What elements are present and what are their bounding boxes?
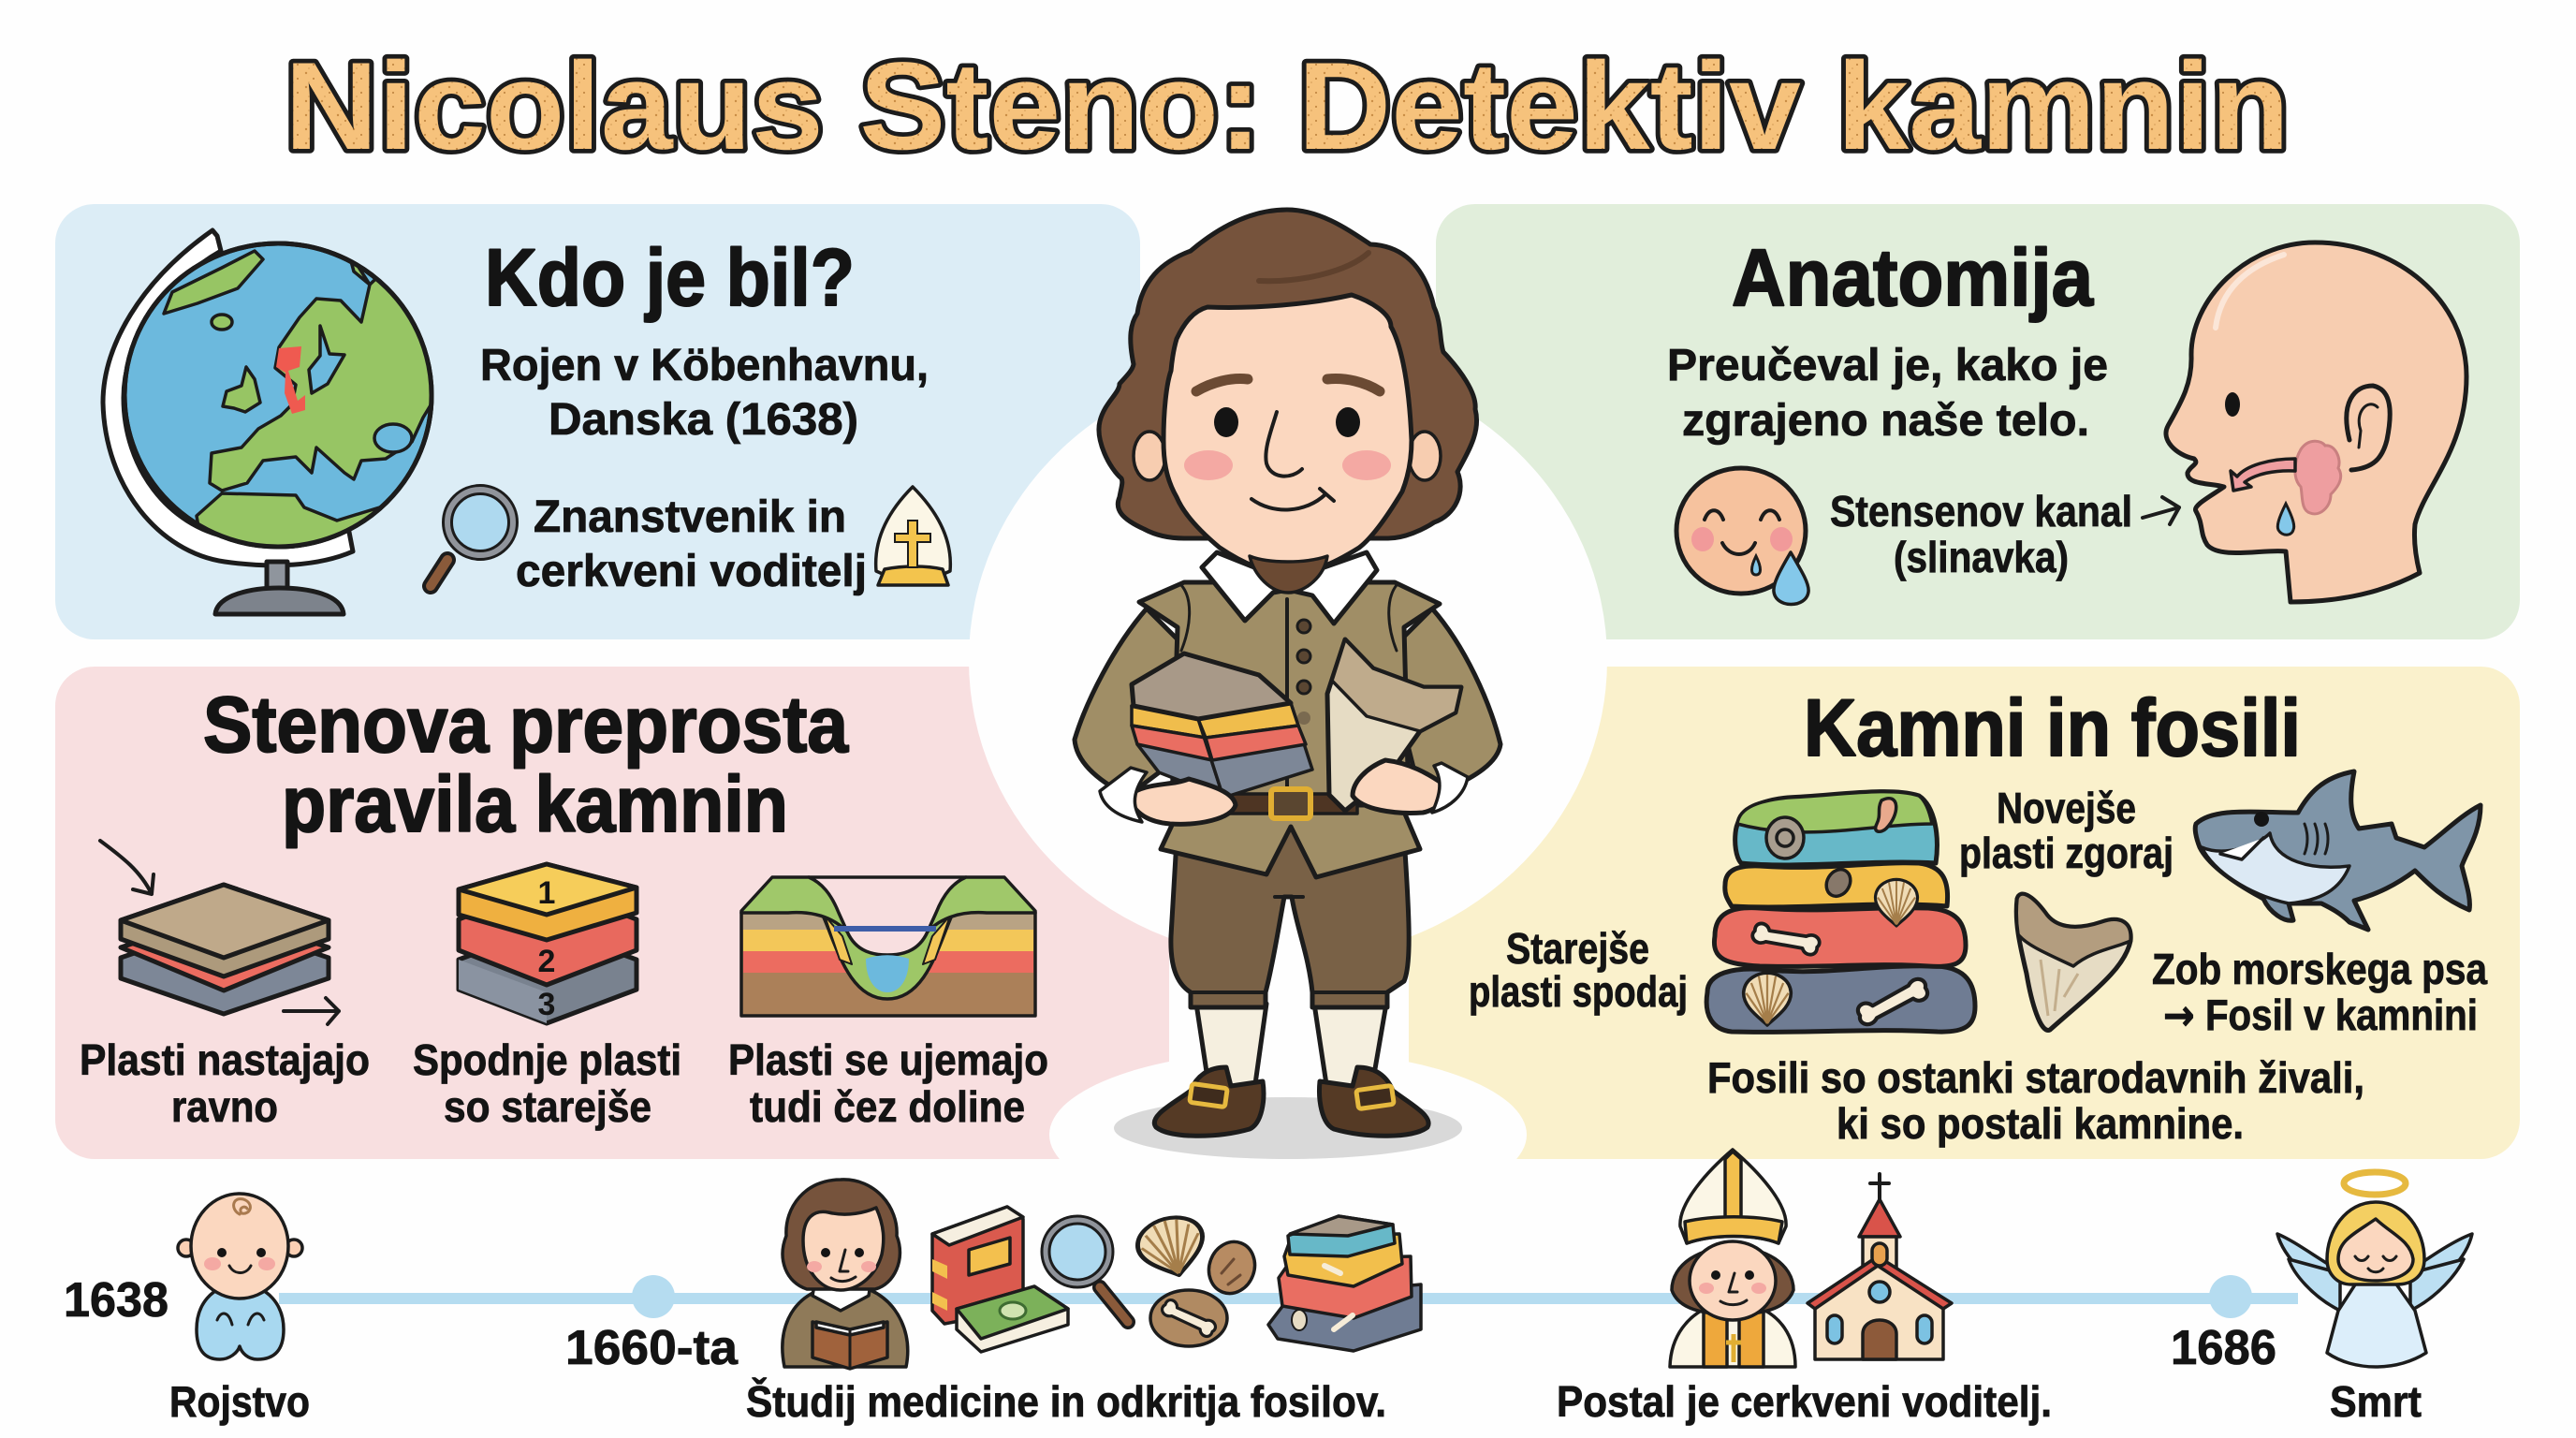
collar — [1202, 552, 1377, 624]
torso — [1139, 582, 1440, 805]
angel hair — [2327, 1202, 2424, 1284]
timeline node 1686 — [2209, 1275, 2252, 1318]
text: anatomy description: Preučeval je, kako je — [1667, 341, 2108, 390]
ground shadow — [1114, 1097, 1462, 1159]
belt and buckle — [1226, 789, 1357, 818]
globe continents — [162, 249, 429, 545]
eyes — [1214, 407, 1238, 437]
arrows — [100, 841, 339, 1024]
timeline node 1660s — [632, 1275, 675, 1318]
valley lining — [816, 903, 959, 999]
brows — [1196, 379, 1380, 391]
year 1686: 1686 — [2171, 1321, 2276, 1375]
shoes — [1154, 1067, 1264, 1136]
icon: baby — [178, 1194, 302, 1359]
text: shark tooth caption: Zob morskega psa — [2152, 945, 2487, 993]
angel halo — [2344, 1172, 2406, 1195]
icon: globe — [103, 230, 449, 614]
goatee — [1250, 556, 1327, 593]
text: anatomy description: zgrajeno naše telo. — [1682, 396, 2089, 446]
heading: Kdo je bil: Kdo je bil? — [485, 233, 855, 323]
right hand — [1353, 760, 1449, 813]
text: Stensen duct label — [1830, 487, 2132, 581]
strata — [741, 913, 1035, 1016]
breeches — [1171, 824, 1409, 1007]
icon: fossil rock layers — [1706, 792, 1975, 1032]
heading: Kamni in fosili: Kamni in fosili — [1804, 683, 2301, 773]
arrow: to mouth — [2143, 497, 2179, 524]
text: rule labels — [80, 1035, 1048, 1131]
mouth — [1251, 489, 1334, 509]
icon: angel — [2277, 1172, 2472, 1367]
text: fossil definition: Fosili so ostanki starodavnih živali, — [1707, 1053, 2364, 1102]
icon: mitre — [876, 487, 950, 585]
central figure: Nicolaus Steno — [1075, 210, 1500, 1159]
text: rule labels: tudi čez doline — [750, 1082, 1025, 1131]
left arm — [1075, 609, 1193, 796]
icon: smiling drooling face — [1676, 468, 1808, 605]
face — [1164, 295, 1412, 573]
text: older layers below: plasti spodaj — [1469, 967, 1688, 1016]
water — [866, 955, 909, 992]
panel: Kamni in fosili background — [1310, 667, 2520, 1159]
heading: Stenova pravila: Stenova preprosta — [203, 681, 849, 769]
year 1638: 1638 — [64, 1273, 168, 1328]
icon: timeline rock stack — [1268, 1216, 1421, 1351]
text: birthplace — [480, 341, 929, 445]
icon: magnifying glass — [431, 490, 513, 586]
text: rule labels: Plasti se ujemajo — [728, 1035, 1048, 1084]
yellow slab — [121, 899, 329, 976]
jacket button placket — [1285, 599, 1289, 796]
text: shark tooth caption — [2152, 945, 2487, 1040]
globe stand arc — [103, 230, 353, 565]
icon: valley strata — [741, 877, 1035, 1016]
panel: Anatomija background — [1436, 204, 2520, 639]
globe outline — [124, 243, 432, 547]
icon: bishop — [1670, 1150, 1795, 1367]
angel dress — [2327, 1279, 2426, 1367]
right cuff — [1432, 763, 1468, 813]
heading: Anatomija: Anatomija — [1732, 233, 2094, 323]
angel face — [2338, 1219, 2413, 1281]
right arm — [1385, 609, 1500, 788]
text: newer layers on top: Novejše — [1997, 784, 2136, 832]
icon: head profile with salivary gland — [2166, 242, 2466, 602]
red slab — [121, 913, 329, 990]
cheeks — [1184, 450, 1233, 480]
label: death: Smrt — [2330, 1377, 2422, 1426]
white strip below panels — [936, 1159, 1647, 1187]
text: rule labels: so starejše — [444, 1082, 651, 1131]
text: shark tooth caption: → Fosil v kamnini — [2163, 990, 2478, 1040]
globe sphere — [124, 243, 432, 547]
title: Nicolaus Steno: Detektiv kamnin — [285, 37, 2290, 176]
icon: numbered layers: 2 — [538, 944, 555, 979]
text: fossil definition: ki so postali kamnine. — [1837, 1099, 2244, 1148]
text: rule labels: Plasti nastajajo — [80, 1035, 370, 1084]
left cuff — [1100, 768, 1147, 822]
white centre column — [1169, 843, 1409, 1161]
text: fossil definition — [1707, 1053, 2364, 1148]
text: rule labels: Spodnje plasti — [413, 1035, 681, 1084]
text: newer layers on top: plasti zgoraj — [1959, 829, 2174, 877]
jacket skirt — [1161, 805, 1420, 877]
text: anatomy description — [1667, 341, 2108, 446]
icon: church — [1808, 1174, 1952, 1359]
text: newer layers on top — [1959, 784, 2174, 877]
timeline line — [279, 1293, 2298, 1304]
gray slab — [121, 922, 329, 1014]
icon: bone in stone — [1150, 1290, 1227, 1346]
socks — [1196, 1004, 1386, 1091]
text: scientist and church leader — [516, 492, 867, 596]
text: rule labels: ravno — [171, 1082, 278, 1131]
icon: red book — [932, 1207, 1023, 1324]
open air of the valley — [809, 877, 966, 955]
stone in left hand — [1132, 653, 1312, 798]
label: studies: Študij medicine in odkritja fosilov. — [746, 1377, 1386, 1426]
heading: Stenova pravila — [203, 681, 849, 848]
label: church leader: Postal je cerkveni voditelj. — [1557, 1377, 2052, 1426]
angel wings — [2277, 1234, 2472, 1297]
heading: Stenova pravila: pravila kamnin — [282, 760, 788, 848]
panel: Kdo je bil background — [55, 204, 1140, 639]
hair back — [1099, 210, 1477, 538]
text: scientist and church leader: Znanstvenik in — [534, 492, 846, 542]
white centre circle behind figure — [969, 360, 1607, 960]
icon: fossil stone — [1202, 1235, 1262, 1300]
icon: shark tooth fossil — [2016, 894, 2130, 1030]
text: Stensen duct label: Stensenov kanal — [1830, 487, 2132, 536]
icon: timeline shell — [1133, 1211, 1211, 1284]
year 1660s: 1660-ta — [565, 1321, 739, 1375]
text: older layers below — [1469, 924, 1688, 1016]
fossil tooth in right hand — [1327, 639, 1461, 811]
icon: shark — [2195, 771, 2481, 930]
icon: numbered layers: 1 — [538, 875, 555, 911]
valley wall wedges — [825, 916, 950, 964]
text: birthplace: Rojen v Köbenhavnu, — [480, 341, 929, 390]
ears — [1134, 432, 1165, 480]
icon: numbered layers: 3 — [538, 987, 555, 1022]
hair streak — [1259, 253, 1368, 281]
text: scientist and church leader: cerkveni voditelj — [516, 547, 867, 596]
tan slab — [121, 885, 329, 976]
icon: timeline magnifier — [1046, 1220, 1128, 1322]
icon: green book — [957, 1286, 1068, 1352]
text: older layers below: Starejše — [1506, 924, 1649, 973]
white oval under feet — [1049, 1050, 1527, 1219]
icon: numbered layers — [459, 864, 637, 1023]
buttons — [1297, 620, 1310, 725]
blue water line — [834, 926, 936, 932]
icon: flat layers stack — [100, 841, 339, 1024]
globe stem and base — [267, 562, 287, 594]
left hand — [1128, 779, 1236, 824]
nose — [1266, 412, 1302, 477]
label: birth: Rojstvo — [169, 1377, 310, 1426]
icon: young Steno reading — [783, 1180, 908, 1369]
text: birthplace: Danska (1638) — [549, 395, 858, 445]
hills — [741, 877, 1035, 932]
shoulder seams — [1181, 585, 1397, 651]
text: Stensen duct label: (slinavka) — [1894, 533, 2069, 581]
panel: Stenova pravila background — [55, 667, 1272, 1159]
